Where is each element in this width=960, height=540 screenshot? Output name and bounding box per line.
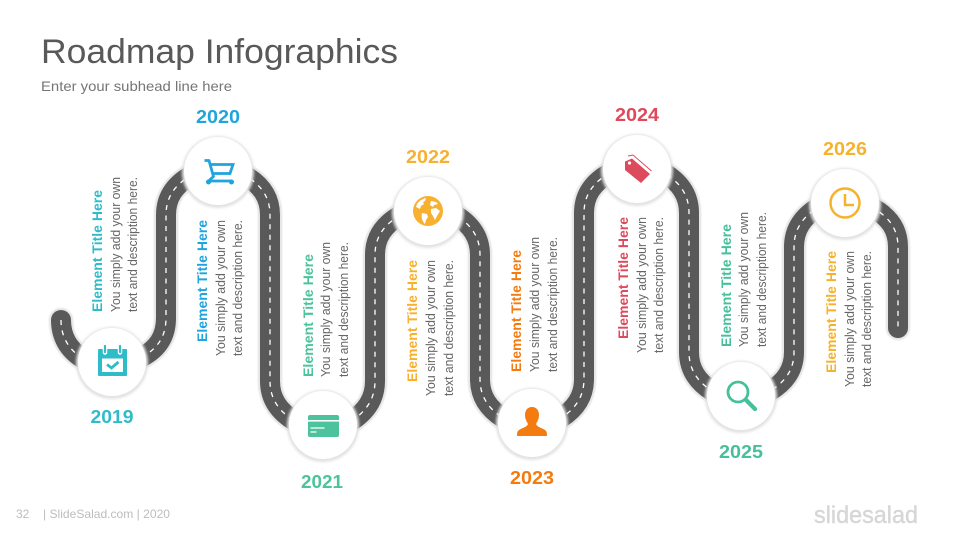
text block: Element Title Here [823, 251, 839, 373]
text block: Element Title Here [615, 217, 631, 339]
text block [194, 220, 245, 356]
text block: text and description here. [337, 242, 351, 377]
milestone 2019 [76, 177, 148, 427]
icon: globe [413, 196, 443, 226]
text block: Element Title Here [718, 224, 734, 347]
text block: text and description here. [442, 260, 456, 396]
text block: You simply add your own [319, 242, 333, 377]
text block: Element Title Here [404, 260, 420, 382]
text block [404, 260, 456, 396]
text block [615, 217, 666, 353]
milestone 2020 [182, 106, 254, 356]
text block [300, 242, 351, 377]
milestone 2026 [809, 138, 881, 387]
text block: Element Title Here [194, 220, 210, 342]
year 2021: 2021 [301, 471, 343, 492]
year 2023: 2023 [510, 467, 554, 488]
text block [823, 251, 874, 387]
year 2024: 2024 [615, 104, 660, 125]
text block: text and description here. [755, 212, 769, 347]
text block [718, 212, 769, 347]
year 2020: 2020 [196, 106, 240, 127]
title: Roadmap Infographics [41, 33, 398, 71]
milestone 2021 [287, 242, 359, 492]
icon: price tag [625, 155, 652, 183]
milestone 2025 [705, 212, 777, 462]
subhead: Enter your subhead line here [41, 78, 232, 94]
text block: Element Title Here [89, 190, 105, 312]
winding road [61, 169, 898, 425]
text block: text and description here. [546, 237, 560, 372]
milestone 2022 [392, 146, 464, 396]
milestone 2024 [601, 104, 673, 353]
text block: You simply add your own [214, 220, 228, 356]
text block: Element Title Here [300, 254, 316, 377]
year 2026: 2026 [823, 138, 867, 159]
icon: magnifier [728, 382, 755, 409]
icon: clock [830, 188, 860, 218]
year 2025: 2025 [719, 441, 763, 462]
text block: You simply add your own [528, 237, 542, 372]
icon: calendar [98, 346, 127, 376]
text block: text and description here. [860, 251, 874, 387]
footer text: | SlideSalad.com | 2020 [43, 507, 170, 521]
year 2022: 2022 [406, 146, 450, 167]
icon: credit card [308, 415, 339, 437]
text block: text and description here. [652, 217, 666, 353]
text block: You simply add your own [737, 212, 751, 347]
icon: person [517, 407, 547, 436]
text block [508, 237, 560, 372]
year 2019: 2019 [90, 406, 134, 427]
text block: You simply add your own [843, 251, 857, 387]
page number: 32 [16, 507, 30, 521]
icon: shopping cart [204, 160, 234, 184]
text block: You simply add your own [109, 177, 123, 312]
text block: Element Title Here [508, 250, 524, 372]
logo wordmark: slidesalad [814, 502, 918, 529]
text block: text and description here. [126, 177, 140, 312]
milestone 2023 [496, 237, 568, 488]
text block: You simply add your own [635, 217, 649, 353]
text block [89, 177, 140, 312]
text block: text and description here. [231, 220, 245, 356]
text block: You simply add your own [424, 260, 438, 396]
